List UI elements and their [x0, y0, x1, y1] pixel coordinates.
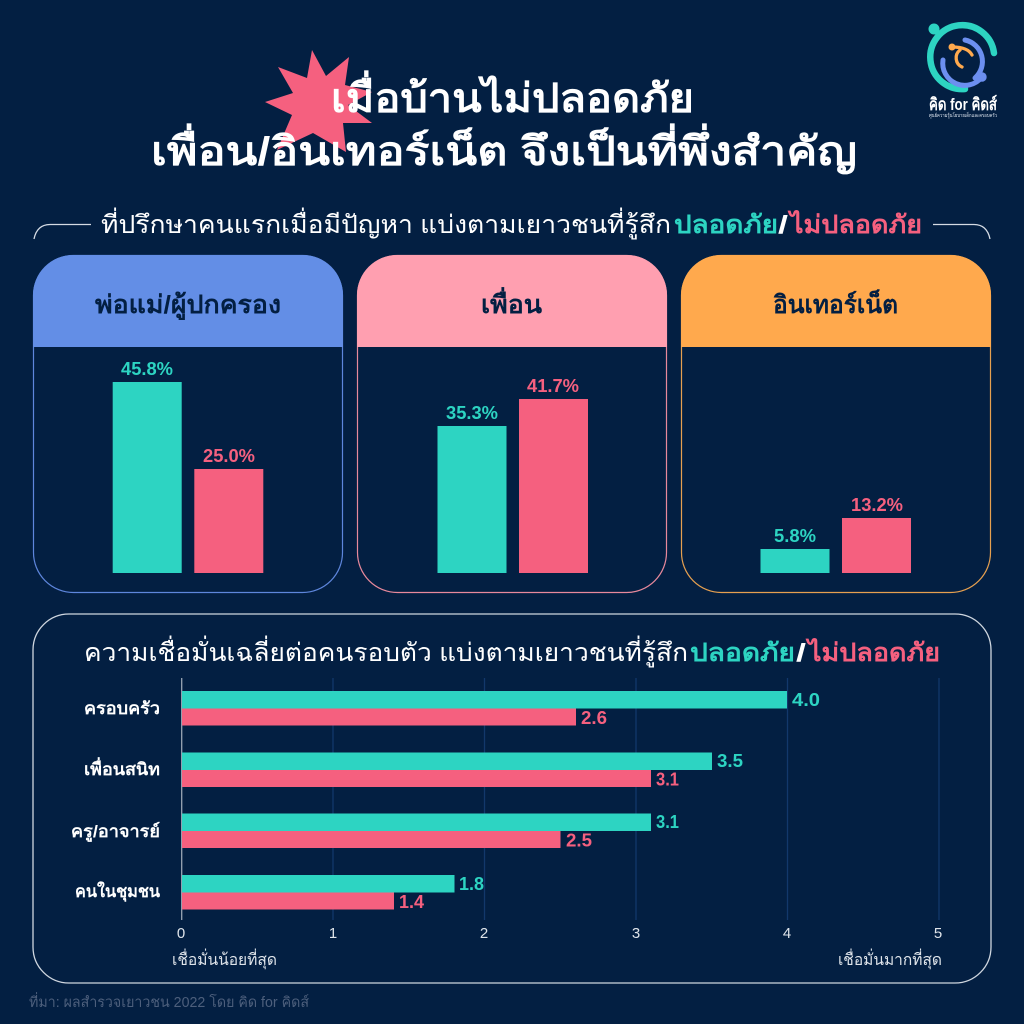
bar group: teachers: 2.5 [566, 830, 592, 850]
bar group: family: 2.6 [581, 708, 607, 728]
axis tick labels: 2 [480, 925, 488, 942]
axis label: least confident: เชื่อมั่นน้อยที่สุด [172, 948, 277, 970]
panel: friends [357, 255, 667, 592]
axis tick labels: 4 [783, 925, 791, 942]
title: เมื่อบ้านไม่ปลอดภัย [331, 70, 694, 121]
bar group: family [84, 690, 820, 728]
title [151, 70, 857, 175]
axis label: most confident: เชื่อมั่นมากที่สุด [838, 948, 942, 970]
icon: pink starburst [265, 50, 372, 152]
bar group: teachers: ครู/อาจารย์ [71, 821, 160, 843]
panel: internet: 13.2% [851, 495, 903, 515]
panel: internet: อินเทอร์เน็ต [773, 289, 898, 319]
panel: parents: พ่อแม่/ผู้ปกครอง [95, 291, 281, 321]
panel: friends: 35.3% [446, 403, 498, 423]
bar group: teachers: 3.1 [656, 812, 679, 832]
bar group: community: คนในชุมชน [75, 881, 160, 902]
panel: parents: 45.8% [121, 359, 173, 379]
heading: confidence chart: ปลอดภัย [690, 639, 795, 667]
heading: first consultant subtitle: / [778, 211, 788, 239]
icon: logo คิด for คิดส์: คิด for คิดส์ [929, 94, 997, 114]
axis tick labels: 0 [177, 925, 185, 942]
bar group: close friends: 3.1 [656, 770, 679, 790]
bar group: community [75, 874, 484, 912]
bar group: community: 1.8 [459, 874, 484, 894]
panel: friends: 41.7% [527, 376, 579, 396]
panel: parents [33, 255, 343, 592]
bar group: family: 4.0 [792, 690, 820, 710]
source note: ที่มา: ผลสำรวจเยาวชน 2022 โดย คิด for คิดส์ [29, 992, 309, 1011]
heading: confidence chart [84, 635, 940, 668]
axis tick labels: 3 [632, 925, 640, 942]
heading: confidence chart: ความเชื่อมั่นเฉลี่ยต่อคนรอบตัว แบ่งตามเยาวชนที่รู้สึก [84, 635, 688, 668]
bar group: family: ครอบครัว [84, 699, 160, 718]
panel: friends: เพื่อน [481, 287, 542, 319]
axis tick labels [177, 925, 942, 942]
panel: parents: 25.0% [203, 446, 255, 466]
bar group: community: 1.4 [399, 892, 424, 912]
bar group: teachers [71, 812, 679, 850]
heading: first consultant subtitle [34, 207, 990, 240]
axis tick labels: 5 [934, 925, 942, 942]
axis tick labels: 1 [329, 925, 337, 942]
panel: internet: 5.8% [774, 526, 816, 546]
bar group: close friends [84, 751, 743, 790]
heading: confidence chart: / [796, 639, 806, 667]
bar group: close friends: 3.5 [717, 751, 743, 771]
heading: first consultant subtitle: ปลอดภัย [674, 211, 778, 239]
panel: internet [681, 255, 991, 592]
heading: first consultant subtitle: ที่ปรึกษาคนแรกเมื่อมีปัญหา แบ่งตามเยาวชนที่รู้สึก [101, 207, 671, 240]
bar group: close friends: เพื่อนสนิท [84, 757, 160, 779]
heading: confidence chart: ไม่ปลอดภัย [805, 637, 940, 667]
panel: average confidence chart [33, 614, 991, 983]
title: เพื่อน/อินเทอร์เน็ต จึงเป็นที่พึ่งสำคัญ [151, 123, 857, 175]
heading: first consultant subtitle: ไม่ปลอดภัย [787, 209, 922, 239]
icon: logo คิด for คิดส์: ศูนย์ความรู้นโยบายเด็กและครอบครัว [929, 111, 997, 119]
icon: logo คิด for คิดส์ [928, 24, 997, 119]
